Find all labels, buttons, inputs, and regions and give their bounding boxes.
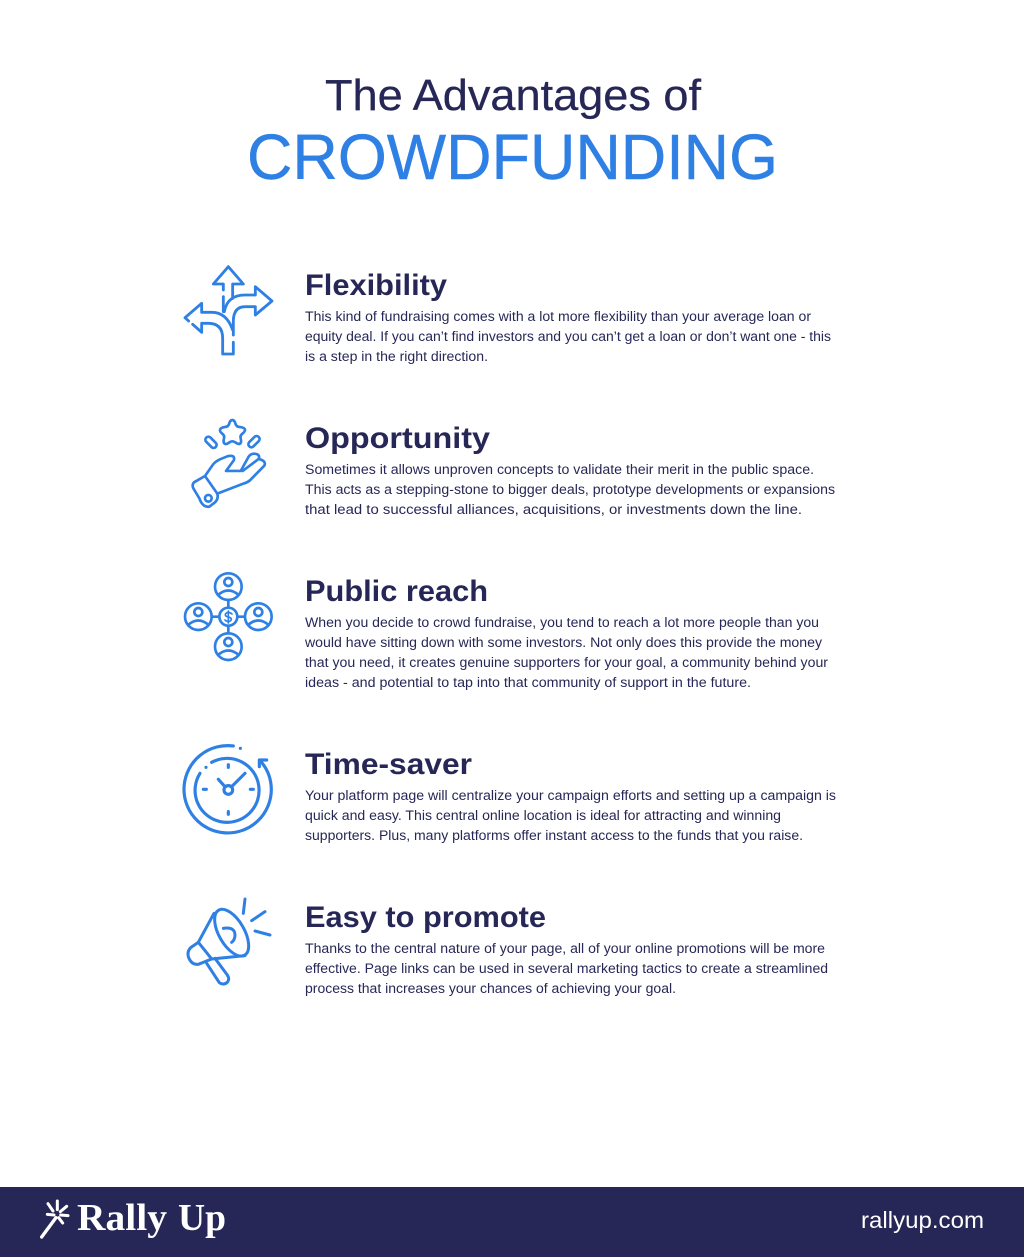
- title: CROWDFUNDING: [247, 121, 778, 193]
- heading: Opportunity: Opportunity: [305, 422, 490, 455]
- text: easy to promote description: [305, 941, 828, 997]
- icon: sparkle wand: [42, 1201, 68, 1237]
- text: easy to promote description: Thanks to the central nature of your page, all of your online promotions will be more: [305, 941, 825, 957]
- panel: public reach: [185, 573, 828, 691]
- text: opportunity description: Sometimes it allows unproven concepts to validate their merit in the public space.: [305, 462, 814, 478]
- icon: megaphone: [188, 899, 270, 984]
- heading: Public reach: Public reach: [305, 575, 488, 608]
- text: time-saver description: quick and easy. This central online location is ideal for attracting and winning: [305, 808, 781, 824]
- text: easy to promote description: effective. Page links can be used in several marketing tactics to create a streamlined: [305, 961, 828, 977]
- panel: easy to promote: [188, 899, 828, 997]
- text: flexibility description: This kind of fundraising comes with a lot more flexibility than your average loan or: [305, 309, 811, 325]
- logo: Rally Up: Up: [178, 1197, 226, 1239]
- footer band: [0, 1187, 1024, 1257]
- text: public reach description: would have sitting down with some investors. Not only does this provide the money: [304, 635, 823, 651]
- text: time-saver description: Your platform page will centralize your campaign efforts and setting up a campaign is: [305, 788, 836, 804]
- icon: branching arrows: [185, 267, 272, 354]
- text: public reach description: When you decide to crowd fundraise, you tend to reach a lot more people than you: [305, 615, 819, 631]
- title: [247, 71, 778, 193]
- icon: people around dollar: [185, 573, 272, 660]
- icon: hand with star: [193, 420, 265, 507]
- text: flexibility description: is a step in the right direction.: [305, 349, 488, 365]
- text: time-saver description: [305, 788, 836, 844]
- text: public reach description: ideas - and potential to tap into that community of support in the future.: [305, 675, 751, 691]
- text: flexibility description: equity deal. If you can’t find investors and you can’t get a loan or don’t want one - this: [305, 329, 831, 345]
- title: The Advantages of: [325, 71, 702, 120]
- heading: Easy to promote: Easy to promote: [305, 901, 546, 934]
- icon: clock with arrow: [184, 746, 271, 833]
- text: opportunity description: This acts as a stepping-stone to bigger deals, prototype developments or expansions: [305, 482, 835, 498]
- panel: time-saver: [184, 746, 836, 844]
- text: easy to promote description: process that increases your chances of achieving your goal.: [305, 981, 676, 997]
- heading: Time-saver: Time-saver: [305, 748, 472, 781]
- text: public reach description: that you need, it creates genuine supporters for your goal, a community behind your: [305, 655, 828, 671]
- heading: Flexibility: Flexibility: [305, 269, 447, 302]
- text: flexibility description: [305, 309, 831, 365]
- logo: Rally Up: Rally: [77, 1197, 167, 1239]
- website url: rallyup.com: [861, 1207, 984, 1233]
- panel: opportunity: [193, 420, 835, 518]
- text: opportunity description: that lead to successful alliances, acquisitions, or investments down the line.: [305, 502, 802, 518]
- text: time-saver description: supporters. Plus, many platforms offer instant access to the funds that you raise.: [305, 828, 803, 844]
- text: opportunity description: [305, 462, 835, 518]
- logo: Rally Up: [42, 1197, 226, 1239]
- panel: flexibility: [185, 267, 831, 365]
- text: public reach description: [304, 615, 828, 691]
